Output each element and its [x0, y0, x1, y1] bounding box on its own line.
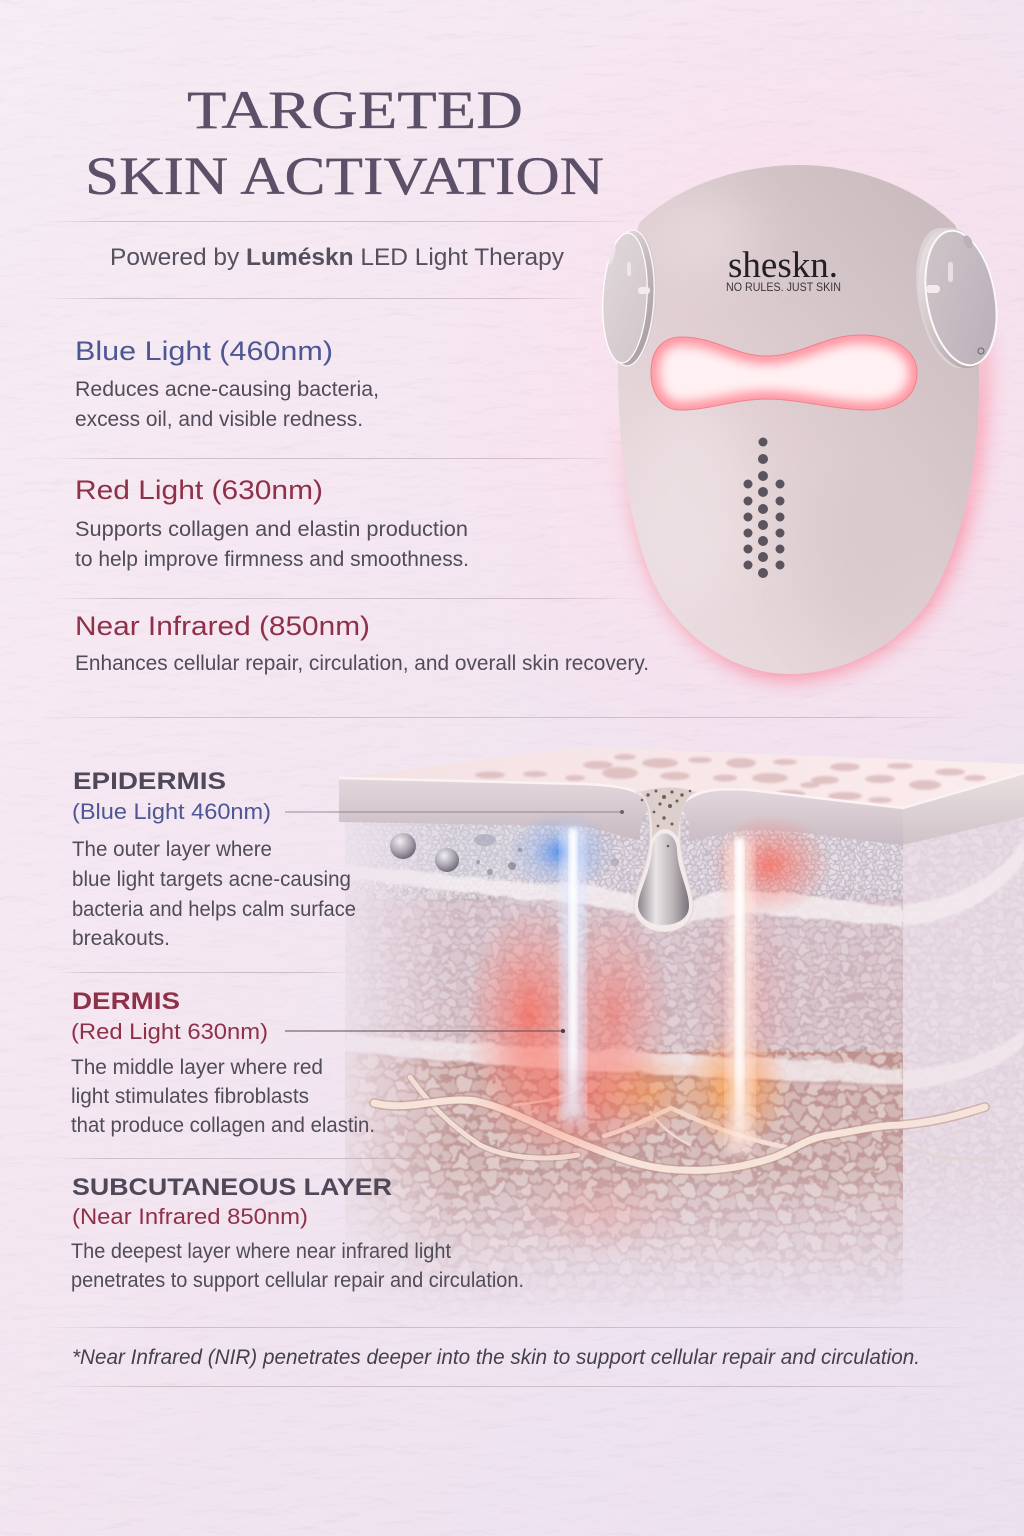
text block: epidermis	[72, 768, 356, 950]
text block: dermis	[71, 988, 375, 1137]
text block: red light	[75, 475, 469, 571]
text block: red light: Supports collagen and elastin production	[75, 517, 468, 541]
LED face mask device	[600, 165, 1008, 674]
footnote: *Near Infrared (NIR) penetrates deeper into the skin to support cellular repair and circulation.	[72, 1345, 920, 1369]
text block: subcutaneous layer	[71, 1174, 524, 1292]
text block: subcutaneous layer: penetrates to support cellular repair and circulation.	[71, 1268, 524, 1292]
text block: dermis: that produce collagen and elastin.	[71, 1113, 375, 1137]
text block: dermis: The middle layer where red	[71, 1055, 323, 1079]
right control dial	[906, 221, 1008, 375]
section divider rules	[40, 221, 980, 1387]
text block: red light: Red Light (630nm)	[75, 475, 323, 505]
dermis cell layer	[345, 890, 903, 1052]
epidermis cell layer	[350, 815, 903, 900]
white band under epidermis	[345, 866, 903, 928]
text block: near infrared: Enhances cellular repair, circulation, and overall skin recovery.	[75, 651, 649, 675]
title: SKIN ACTIVATION	[85, 146, 604, 206]
text block: epidermis: EPIDERMIS	[73, 768, 226, 795]
light beam: red 630nm	[727, 838, 753, 1153]
text block: epidermis: blue light targets acne-causing	[72, 867, 351, 891]
text block: dermis: DERMIS	[72, 988, 180, 1015]
panel: skin cross-section illustration	[335, 747, 1024, 1335]
text block: subcutaneous layer: SUBCUTANEOUS LAYER	[72, 1174, 392, 1201]
light beam: blue 460nm	[561, 829, 585, 1121]
text block: epidermis: bacteria and helps calm surface	[72, 897, 356, 921]
text block: near infrared: Near Infrared (850nm)	[75, 611, 370, 641]
leader line: epidermis	[285, 810, 624, 814]
left control dial	[600, 229, 659, 367]
text block: subcutaneous layer: The deepest layer where near infrared light	[71, 1239, 451, 1263]
text block: blue light: Blue Light (460nm)	[75, 336, 333, 366]
text block: epidermis: The outer layer where	[72, 837, 272, 861]
nerve fibres	[374, 1077, 994, 1170]
skin front layers	[335, 805, 915, 1335]
mask surface shading	[668, 205, 739, 536]
text block: near infrared	[75, 611, 649, 675]
mask body	[618, 165, 979, 674]
title	[85, 80, 604, 206]
text block: epidermis: breakouts.	[72, 926, 170, 950]
subtitle: Powered by Luméskn LED Light Therapy	[110, 244, 564, 271]
icon: clogged pore follicle	[634, 788, 696, 932]
mask red glow	[622, 340, 986, 680]
text block: blue light	[75, 336, 379, 431]
brand logo: NO RULES. JUST SKIN	[726, 282, 841, 294]
text block: blue light: Reduces acne-causing bacteria,	[75, 377, 379, 401]
subcutaneous cell layer	[345, 1045, 903, 1299]
leader line: dermis	[285, 1029, 565, 1033]
brand logo: sheskn.	[728, 245, 838, 286]
title: TARGETED	[187, 80, 523, 140]
skin right side face	[903, 817, 1024, 1262]
text block: dermis: (Red Light 630nm)	[71, 1019, 268, 1044]
text block: red light: to help improve firmness and smoothness.	[75, 547, 469, 571]
text block: dermis: light stimulates fibroblasts	[71, 1084, 309, 1108]
light glows	[465, 812, 832, 1260]
band above subcutaneous layer	[345, 1034, 903, 1084]
text block: epidermis: (Blue Light 460nm)	[72, 799, 271, 824]
skin top surface with pores	[339, 747, 1024, 808]
text block: blue light: excess oil, and visible redness.	[75, 407, 363, 431]
mask eye window with red glow	[651, 335, 917, 410]
text block: subcutaneous layer: (Near Infrared 850nm)	[72, 1204, 308, 1229]
icon: sebum droplets	[390, 833, 619, 875]
LED dot array	[744, 438, 784, 578]
epidermis front slab with pore dip	[339, 773, 1024, 845]
